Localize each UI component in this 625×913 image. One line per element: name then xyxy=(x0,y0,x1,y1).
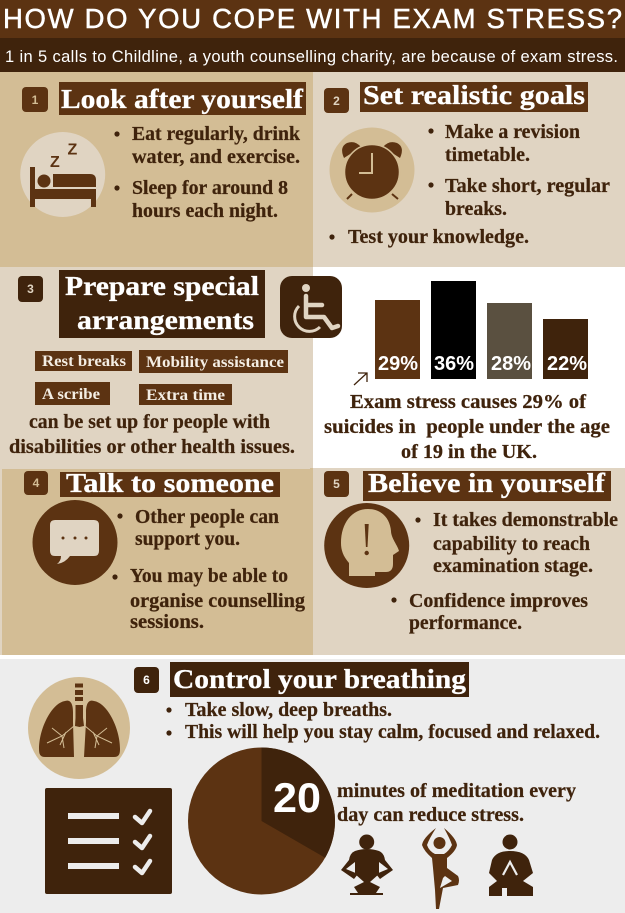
tag: mobility assistance xyxy=(139,350,288,373)
meditation caption xyxy=(337,780,576,826)
bullet list 1: water, and exercise. xyxy=(132,146,300,168)
tag: a scribe xyxy=(35,382,110,405)
bullet list 5: Confidence improves xyxy=(409,590,588,612)
bullet list 4: sessions. xyxy=(130,611,204,633)
icon: tree pose figure xyxy=(422,828,459,909)
tag: extra time xyxy=(139,384,232,405)
tag: rest breaks xyxy=(35,351,132,371)
tag: a scribe: A scribe xyxy=(42,386,100,403)
bullet list 5: performance. xyxy=(409,612,522,634)
badge 5: 5 xyxy=(333,477,340,491)
bullet list 6: This will help you stay calm, focused and relaxed. xyxy=(185,721,600,743)
bullet list 4 xyxy=(112,506,305,633)
arrangements caption: can be set up for people with xyxy=(29,411,270,433)
panel 1: look after yourself xyxy=(0,72,313,267)
chart caption: suicides in people under the age xyxy=(324,416,610,438)
bullet list 6: Take slow, deep breaths. xyxy=(185,699,392,721)
heading 3: arrangements xyxy=(77,304,254,335)
bullet list 1: Sleep for around 8 xyxy=(132,177,288,199)
bullet list 4: You may be able to xyxy=(130,565,288,587)
panel 3: prepare special arrangements xyxy=(0,267,313,469)
meditation caption: day can reduce stress. xyxy=(337,804,524,826)
bullet list 5: It takes demonstrable xyxy=(433,509,618,531)
bar chart xyxy=(375,281,588,379)
bullet list 5: capability to reach xyxy=(433,533,590,555)
heading 2: Set realistic goals xyxy=(363,79,585,110)
heading 6: Control your breathing xyxy=(173,663,466,694)
bullet list 6 xyxy=(166,699,600,743)
bullet list 4: organise counselling xyxy=(130,590,305,612)
bullet list 2: timetable. xyxy=(445,144,530,166)
title banner: HOW DO YOU COPE WITH EXAM STRESS? xyxy=(3,3,622,34)
icon: alarm clock xyxy=(330,128,414,212)
badge 4 xyxy=(24,471,48,495)
bar chart: 36% xyxy=(434,352,474,375)
bar chart: 28% xyxy=(491,352,531,375)
badge 2 xyxy=(324,88,349,113)
panel 4: talk to someone xyxy=(0,467,313,655)
badge 2: 2 xyxy=(333,94,340,108)
chart caption: of 19 in the UK. xyxy=(401,441,537,463)
icon: speech bubble xyxy=(32,500,118,585)
pie chart xyxy=(188,748,335,894)
badge 4: 4 xyxy=(33,476,40,490)
bullet list 5 xyxy=(391,509,618,634)
bullet list 4: support you. xyxy=(135,528,240,550)
arrangements caption xyxy=(9,411,295,458)
icon: lungs xyxy=(28,677,130,779)
badge 3 xyxy=(18,276,43,302)
icon: head with exclamation mark xyxy=(324,503,409,588)
icon: sleeping in bed: Z xyxy=(50,154,60,171)
badge 1 xyxy=(22,87,48,112)
heading 5: Believe in yourself xyxy=(368,467,606,498)
bullet list 2: Take short, regular xyxy=(445,175,610,197)
panel 5: believe in yourself xyxy=(313,467,625,655)
badge 3: 3 xyxy=(27,282,34,296)
heading 3: Prepare special xyxy=(65,270,259,301)
tag: rest breaks: Rest breaks xyxy=(42,353,126,370)
badge 5 xyxy=(324,471,349,497)
bullet list 5: examination stage. xyxy=(433,555,593,577)
badge 1: 1 xyxy=(32,93,39,107)
panel: suicide statistics chart xyxy=(313,267,625,468)
icon: sleeping in bed xyxy=(20,132,105,217)
icon: checklist xyxy=(45,788,172,894)
icon: cross-legged meditation figure xyxy=(341,834,393,895)
subtitle banner: 1 in 5 calls to Childline, a youth counselling charity, are because of exam stress. xyxy=(5,48,618,66)
icon: sleeping in bed: Z xyxy=(68,142,78,158)
tag: mobility assistance: Mobility assistance xyxy=(146,354,284,371)
arrangements caption: disabilities or other health issues. xyxy=(9,436,295,458)
bullet list 2: breaks. xyxy=(445,198,507,220)
icon: wheelchair xyxy=(280,276,342,338)
panel 6: control your breathing xyxy=(0,659,625,913)
bullet list 1: Eat regularly, drink xyxy=(132,123,301,145)
chart caption: Exam stress causes 29% of xyxy=(350,391,586,413)
bullet list 2: Make a revision xyxy=(445,121,580,143)
pie chart: 20 xyxy=(273,774,321,821)
icon: seated namaste figure xyxy=(489,834,533,896)
bullet list 2: Test your knowledge. xyxy=(348,226,529,248)
bar chart: 29% xyxy=(378,352,418,375)
heading 1: Look after yourself xyxy=(61,83,304,114)
meditation caption: minutes of meditation every xyxy=(337,780,576,802)
heading 3 xyxy=(59,270,265,338)
heading 4: Talk to someone xyxy=(66,467,274,498)
bullet list 4: Other people can xyxy=(135,506,279,528)
bullet list 1 xyxy=(114,123,301,222)
bar chart: 22% xyxy=(547,352,587,375)
panel 2: set realistic goals xyxy=(313,72,625,267)
tag: extra time: Extra time xyxy=(146,387,225,404)
badge 6 xyxy=(134,667,159,693)
bullet list 1: hours each night. xyxy=(132,200,278,222)
chart caption xyxy=(324,391,610,463)
bullet list 2 xyxy=(329,121,610,248)
badge 6: 6 xyxy=(143,673,150,687)
subtitle banner xyxy=(0,38,625,72)
arrow xyxy=(354,373,367,385)
